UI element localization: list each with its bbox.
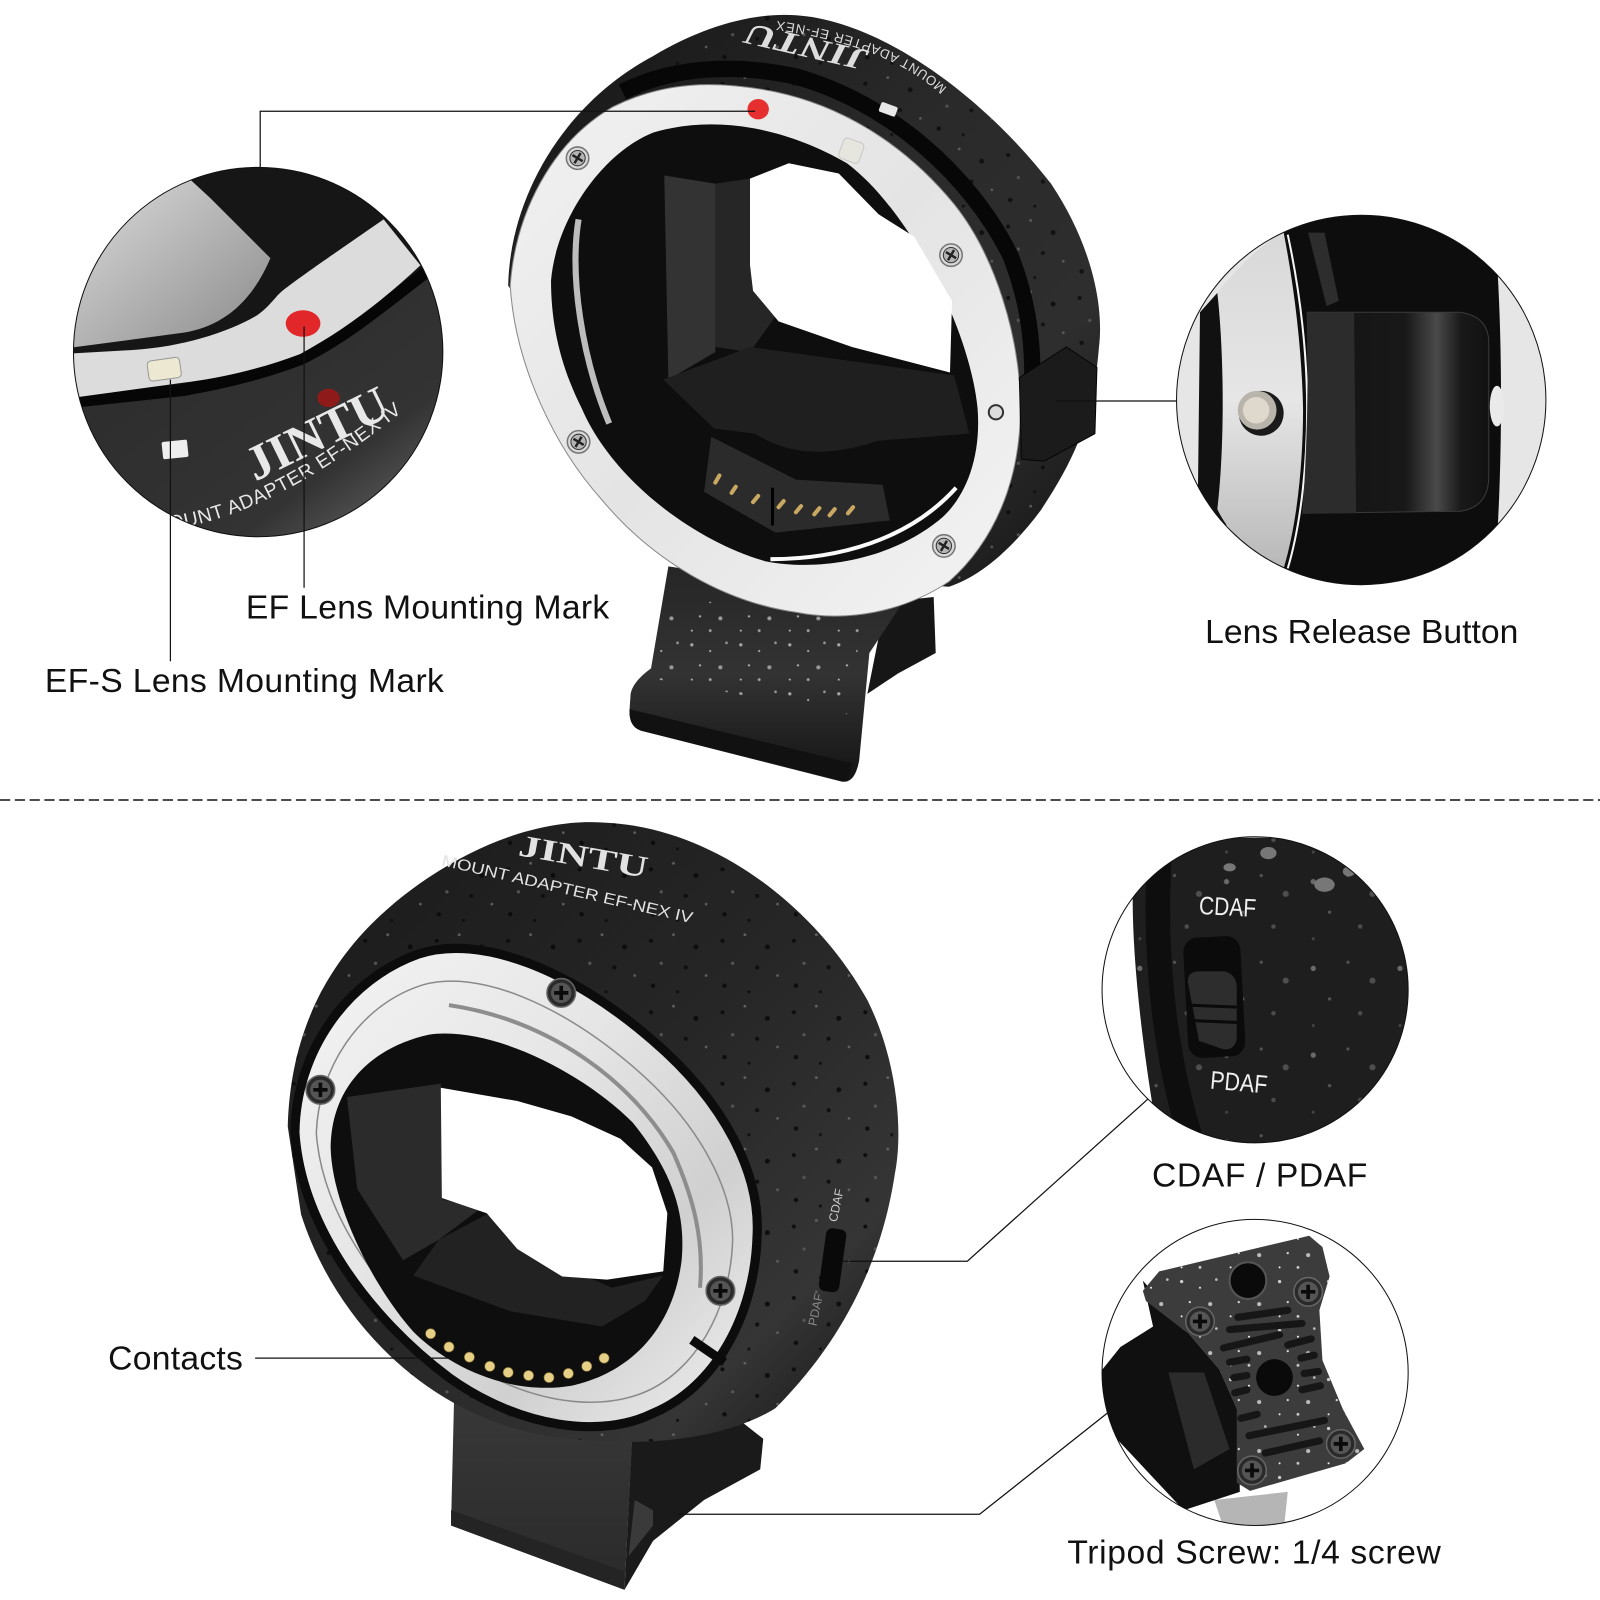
- lower body band: [82, 279, 442, 536]
- AF switch on body: [806, 1188, 847, 1327]
- lens window (see-through): [750, 163, 952, 372]
- silver screw: [1214, 1492, 1288, 1525]
- electronic contacts block: [704, 437, 890, 533]
- CDAF label: CDAF: [1198, 892, 1257, 923]
- ring screws: [566, 147, 1003, 557]
- silver mount ring: [295, 948, 757, 1427]
- curved band: [1158, 862, 1194, 1148]
- silver lens mount ring: [510, 85, 1020, 616]
- inner opening: [331, 1034, 682, 1388]
- label: EF Lens Mounting Mark: EF Lens Mounting Mark: [246, 589, 609, 626]
- brand text: MOUNT ADAPTER EF-NEX IV: [173, 402, 398, 525]
- circle outline: tripod: [1102, 1219, 1408, 1526]
- circle outline: right: [1177, 215, 1546, 585]
- section divider: [0, 799, 1600, 801]
- callout: lens release button close-up: [1173, 204, 1551, 602]
- lens window (see-through): [441, 1088, 667, 1280]
- label: Lens Release Button: Lens Release Button: [1205, 614, 1518, 651]
- callout: EF mounting marks close-up: [74, 168, 442, 536]
- plate: [1143, 1236, 1364, 1491]
- circle outline: CDAF: [1102, 837, 1408, 1143]
- holes: [1230, 1262, 1293, 1396]
- leader lines: [170, 111, 1177, 1514]
- mount screws: [306, 979, 735, 1305]
- PDAF label: PDAF: [1209, 1067, 1269, 1099]
- left black band: [1198, 293, 1226, 526]
- AF switch on body: PDAF: [806, 1292, 826, 1327]
- lens release button: [1019, 347, 1097, 461]
- dim red and white body marks: [161, 389, 340, 459]
- black clamp and knob: [1100, 1281, 1240, 1510]
- red mark: [286, 310, 320, 337]
- gold contacts: [426, 1329, 609, 1383]
- label: Tripod Screw: Tripod Screw: 1/4 screw: [1067, 1534, 1442, 1571]
- black body: [1284, 204, 1501, 602]
- callout: CDAF PDAF switch close-up: [1132, 838, 1408, 1142]
- panel: bottom adapter photo: [288, 822, 898, 1590]
- adapter body, bottom view: [288, 822, 898, 1442]
- silver band: [1217, 233, 1303, 568]
- brand text on top body: JINTU: [739, 16, 872, 78]
- adapter foot, top view: [630, 566, 936, 782]
- adapter foot, bottom view: [451, 1398, 763, 1590]
- body mark: [878, 102, 898, 117]
- grey lens opening: [74, 180, 270, 348]
- panel: top adapter photo: [508, 14, 1100, 782]
- switch slot: [1183, 935, 1246, 1059]
- inner bracket detail: [1308, 233, 1339, 306]
- white notch: [1490, 386, 1502, 426]
- EF mark: red dot: [747, 99, 769, 119]
- brand text on bottom body: JINTU: [516, 829, 651, 885]
- lens release slot: [692, 1340, 724, 1362]
- label: Contacts: Contacts: [108, 1340, 243, 1377]
- label: CDAF / PDAF: CDAF / PDAF: [1152, 1158, 1367, 1195]
- adapter body, top view: [508, 15, 1100, 587]
- callout: tripod plate close-up: [1102, 1236, 1364, 1525]
- dark body: [1133, 838, 1412, 1145]
- slider: [1188, 971, 1237, 1049]
- brand text: JINTU: [236, 375, 397, 492]
- EF-S mark: white square: [838, 137, 865, 164]
- circle outline: left: [73, 167, 443, 537]
- AF switch on body: CDAF: [826, 1188, 847, 1223]
- white mark: [147, 357, 182, 382]
- pin: [1238, 391, 1284, 436]
- plate screws: [1186, 1278, 1355, 1485]
- inner opening: [551, 124, 978, 565]
- brand text on bottom body: MOUNT ADAPTER EF-NEX IV: [440, 853, 695, 927]
- silver band: [61, 219, 420, 397]
- plate slots: [1223, 1310, 1324, 1453]
- brand text on top body: MOUNT ADAPTER EF-NEX: [776, 20, 946, 94]
- inner blocks: [347, 1084, 663, 1327]
- large water drops: [1223, 847, 1355, 892]
- button: [1303, 312, 1489, 513]
- brand text on bottom body: [440, 829, 695, 927]
- label: EF-S Lens Mounting Mark: EF-S Lens Mounting Mark: [45, 663, 444, 700]
